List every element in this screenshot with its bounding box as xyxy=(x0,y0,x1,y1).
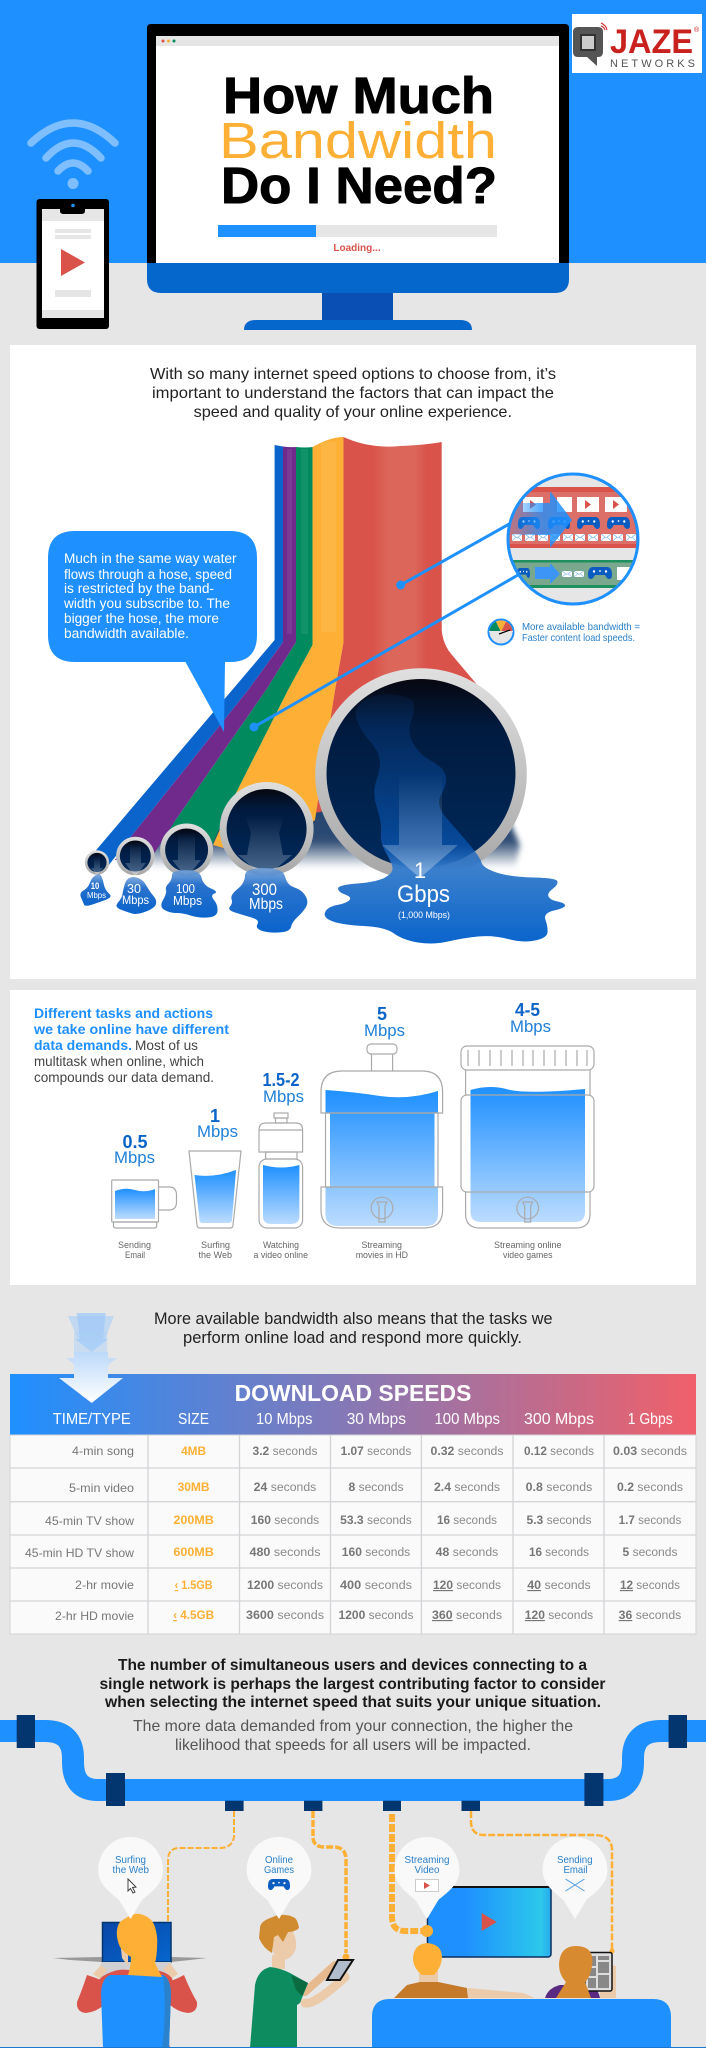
callout: water hose analogy: bigger the hose, the more xyxy=(64,611,219,626)
puddle: 1 Gbps: Gbps xyxy=(397,881,450,908)
text block: simultaneous users: The number of simultaneous users and devices connecting to a xyxy=(118,1657,587,1674)
hose: 100 Mbps green xyxy=(165,447,312,860)
container: large jar 4-5 Mbps: video games xyxy=(503,1250,553,1261)
container: sports bottle 1.5-2 Mbps: 1.5-2 xyxy=(262,1070,300,1090)
loading progress bar: Loading... xyxy=(333,243,381,254)
callout: water hose analogy: Much in the same way water xyxy=(64,551,237,566)
table title: DOWNLOAD SPEEDS xyxy=(235,1380,471,1406)
speed values: 53.3 seconds xyxy=(340,1515,412,1527)
dashed connection: surfing xyxy=(168,1811,234,1923)
text block: simultaneous users xyxy=(100,1657,606,1711)
text block: simultaneous users: when selecting the internet speed that suits your unique situation. xyxy=(104,1694,601,1711)
size column xyxy=(173,1444,214,1622)
title xyxy=(219,67,497,214)
speech bubble: streaming video: Streaming xyxy=(404,1854,450,1866)
row labels xyxy=(25,1444,134,1623)
pipe opening: 30 Mbps xyxy=(116,837,155,877)
speed values: 1200 seconds xyxy=(338,1610,414,1622)
logo: Jaze Networks xyxy=(572,14,702,73)
speech bubble: surfing the web xyxy=(98,1837,163,1919)
speech bubble: online games: Games xyxy=(264,1864,294,1876)
text block: different tasks: data demands. xyxy=(34,1037,132,1053)
text block: different tasks: multitask when online, which xyxy=(34,1053,204,1069)
intro text: With so many internet speed options to choose from, it’s xyxy=(150,366,556,383)
speed values: 480 seconds xyxy=(250,1547,321,1559)
speech bubble: streaming video: Video xyxy=(414,1864,440,1876)
container: mug 0.5 Mbps xyxy=(112,1132,176,1261)
panel: task data demands xyxy=(10,990,696,1285)
puddle: 30 Mbps: Mbps xyxy=(122,893,149,907)
text block: more data demanded: The more data demanded from your connection, the higher the xyxy=(133,1718,573,1735)
hose: 10 Mbps blue xyxy=(90,445,283,870)
column headers: 10 Mbps xyxy=(256,1411,312,1428)
title: How Much xyxy=(223,67,494,124)
callout: water hose analogy: width you subscribe to. The xyxy=(63,596,230,611)
person: man with phone xyxy=(250,1915,353,2048)
container: large jar 4-5 Mbps: Streaming online xyxy=(494,1240,562,1251)
speed values: 400 seconds xyxy=(340,1580,412,1592)
speed values: 2.4 seconds xyxy=(434,1482,500,1494)
pipe opening: 10 Mbps xyxy=(85,850,109,875)
icon: smartphone with play button xyxy=(36,199,109,329)
floor line xyxy=(0,2047,706,2048)
text block: faster load: perform online load and respond more quickly. xyxy=(183,1329,522,1347)
size column: 30MB xyxy=(178,1480,210,1494)
container: water jug 5 Mbps xyxy=(321,1004,443,1261)
speech bubble: online games: Online xyxy=(265,1854,293,1866)
size column: 4MB xyxy=(181,1444,206,1458)
text block: faster load: More available bandwidth also means that the tasks we xyxy=(154,1310,552,1328)
puddle: 10 Mbps xyxy=(80,874,111,906)
callout: water hose analogy xyxy=(48,531,257,732)
person: viewer watching tv xyxy=(394,1943,535,1998)
puddle: 1 Gbps: 1 xyxy=(414,858,426,883)
container: sports bottle 1.5-2 Mbps: Mbps xyxy=(263,1087,304,1106)
puddle: 1 Gbps xyxy=(325,695,565,944)
speed values: 160 seconds xyxy=(342,1547,410,1559)
intro text: important to understand the factors that can impact the xyxy=(152,385,554,402)
title: Bandwidth xyxy=(219,112,497,169)
gauge caption: Faster content load speeds. xyxy=(522,632,635,644)
logo: Jaze Networks: JAZE xyxy=(610,23,693,61)
text block: different tasks: compounds our data demand. xyxy=(34,1069,214,1085)
container: water jug 5 Mbps: 5 xyxy=(377,1004,387,1024)
speed values: 5.3 seconds xyxy=(526,1515,592,1527)
size column: ‹ 4.5GB xyxy=(173,1608,214,1622)
table: download speeds xyxy=(10,1374,696,1634)
icon: wifi signal xyxy=(31,123,115,189)
row labels: 5-min video xyxy=(69,1481,134,1495)
container: glass 1 Mbps: the Web xyxy=(198,1250,232,1261)
row labels: 2-hr movie xyxy=(75,1578,134,1592)
text block: different tasks xyxy=(33,1005,229,1085)
text block: more data demanded: likelihood that speeds for all users will be impacted. xyxy=(175,1737,531,1754)
speed values: 5 seconds xyxy=(622,1547,678,1559)
container: large jar 4-5 Mbps: Mbps xyxy=(510,1017,551,1036)
callout: water hose analogy: flows through a hose, speed xyxy=(64,567,232,582)
container: mug 0.5 Mbps: 0.5 xyxy=(122,1132,148,1152)
text block: more data demanded xyxy=(133,1718,573,1754)
speed values: 3.2 seconds xyxy=(252,1446,318,1458)
puddle: 10 Mbps: Mbps xyxy=(87,891,106,900)
text block: different tasks: Different tasks and actions xyxy=(34,1005,213,1021)
hose: 30 Mbps purple xyxy=(115,446,296,860)
container: water jug 5 Mbps: Streaming xyxy=(362,1240,402,1251)
puddle: 1 Gbps: (1,000 Mbps) xyxy=(398,910,450,920)
dashed connection: email xyxy=(471,1811,614,1954)
puddle: 300 Mbps xyxy=(229,868,307,933)
text block: different tasks: Most of us xyxy=(135,1037,198,1053)
pipe shadow xyxy=(150,800,520,868)
puddle: 300 Mbps: Mbps xyxy=(249,896,283,913)
puddle: 100 Mbps xyxy=(161,870,218,918)
speech bubble: sending email xyxy=(543,1837,607,1919)
container: glass 1 Mbps: Mbps xyxy=(197,1122,238,1141)
speed values: 48 seconds xyxy=(436,1547,499,1559)
television xyxy=(428,1886,551,1957)
title: Do I Need? xyxy=(221,157,497,214)
container: water jug 5 Mbps: Mbps xyxy=(364,1021,405,1040)
speech bubble: sending email: Sending xyxy=(557,1854,593,1866)
callout: water hose analogy: bandwidth available. xyxy=(64,626,189,641)
logo: Jaze Networks: ® xyxy=(694,26,700,34)
column headers: SIZE xyxy=(178,1411,209,1428)
pipe opening: 300 Mbps xyxy=(220,782,314,878)
speed values xyxy=(246,1446,687,1622)
logo: Jaze Networks: NETWORKS xyxy=(610,58,695,70)
container: glass 1 Mbps: 1 xyxy=(210,1106,220,1126)
speed values: 120 seconds xyxy=(433,1580,501,1592)
column headers: TIME/TYPE xyxy=(53,1411,131,1428)
intro text: speed and quality of your online experience. xyxy=(194,404,512,421)
speed values: 24 seconds xyxy=(254,1482,317,1494)
container: large jar 4-5 Mbps: 4-5 xyxy=(515,1000,540,1020)
container: mug 0.5 Mbps: Sending xyxy=(118,1240,151,1251)
container: sports bottle 1.5-2 Mbps: a video online xyxy=(254,1250,308,1261)
icon: desktop monitor xyxy=(147,24,569,330)
column headers: 1 Gbps xyxy=(628,1411,673,1428)
sofa xyxy=(372,1999,671,2048)
pipe opening: 1 Gbps xyxy=(315,668,527,880)
speed values: 360 seconds xyxy=(432,1610,502,1622)
header blue band xyxy=(0,0,706,263)
speed values: 16 seconds xyxy=(529,1547,589,1559)
container: water jug 5 Mbps: movies in HD xyxy=(356,1250,408,1261)
row labels: 45-min TV show xyxy=(45,1514,134,1528)
container: mug 0.5 Mbps: Mbps xyxy=(114,1148,155,1167)
panel: hose comparison xyxy=(10,345,696,979)
container: glass 1 Mbps xyxy=(189,1106,241,1261)
puddle: 30 Mbps: 30 xyxy=(127,881,141,896)
hose: 1 Gbps red xyxy=(315,437,490,813)
container: glass 1 Mbps: Surfing xyxy=(201,1240,230,1251)
column headers xyxy=(53,1411,673,1428)
puddle: 30 Mbps xyxy=(116,877,156,914)
size column: 600MB xyxy=(173,1545,214,1559)
size column: 200MB xyxy=(173,1513,214,1527)
hose: 300 Mbps yellow xyxy=(213,437,344,860)
network pipe xyxy=(0,1715,706,1811)
speed values: 1200 seconds xyxy=(247,1580,323,1592)
row labels: 2-hr HD movie xyxy=(55,1609,134,1623)
container: mug 0.5 Mbps: Email xyxy=(125,1250,145,1261)
speed values: 36 seconds xyxy=(619,1610,682,1622)
person: woman at laptop xyxy=(53,1914,207,2048)
speed values: 0.32 seconds xyxy=(430,1446,504,1458)
speed values: 3600 seconds xyxy=(246,1610,324,1622)
speed values: 1.7 seconds xyxy=(619,1515,682,1527)
speed values: 160 seconds xyxy=(251,1515,319,1527)
speed values: 0.8 seconds xyxy=(526,1482,593,1494)
loading progress bar xyxy=(218,225,497,254)
column headers: 100 Mbps xyxy=(434,1411,500,1428)
puddle: 300 Mbps: 300 xyxy=(252,880,277,899)
row labels: 45-min HD TV show xyxy=(25,1546,134,1560)
text block: different tasks: we take online have different xyxy=(33,1021,229,1037)
intro text xyxy=(150,366,556,421)
arrow: stacked download arrows xyxy=(59,1313,123,1403)
table body xyxy=(10,1435,696,1634)
speed values: 1.07 seconds xyxy=(341,1446,412,1458)
dashed connection: streaming xyxy=(392,1814,433,1937)
speech bubble: streaming video xyxy=(395,1837,459,1919)
icon: speed gauge xyxy=(488,620,514,644)
container: sports bottle 1.5-2 Mbps xyxy=(254,1070,308,1261)
puddle: 100 Mbps: 100 xyxy=(176,881,195,896)
speed values: 16 seconds xyxy=(437,1515,497,1527)
speed values: 0.12 seconds xyxy=(524,1446,594,1458)
gauge caption: More available bandwidth = xyxy=(522,621,640,633)
container: sports bottle 1.5-2 Mbps: Watching xyxy=(263,1240,299,1251)
speech bubble: surfing the web: the Web xyxy=(112,1864,149,1876)
speed values: 120 seconds xyxy=(525,1610,593,1622)
puddle: 10 Mbps: 10 xyxy=(91,881,99,891)
column headers: 300 Mbps xyxy=(524,1411,594,1428)
text block: faster load xyxy=(154,1310,552,1347)
magnifier leader lines xyxy=(250,523,518,732)
speed values: 40 seconds xyxy=(527,1580,591,1592)
row labels: 4-min song xyxy=(72,1444,134,1458)
gauge caption xyxy=(522,621,640,644)
column headers: 30 Mbps xyxy=(347,1411,406,1428)
pipe opening: 100 Mbps xyxy=(160,824,213,878)
size column: ‹ 1.5GB xyxy=(175,1578,213,1592)
puddle: 100 Mbps: Mbps xyxy=(173,893,202,908)
speech bubble: sending email: Email xyxy=(564,1864,588,1876)
speed values: 12 seconds xyxy=(620,1580,680,1592)
speed values: 8 seconds xyxy=(348,1482,404,1494)
callout: water hose analogy: is restricted by the band- xyxy=(64,581,214,596)
dashed connection: games xyxy=(313,1811,350,1960)
table header band xyxy=(10,1374,696,1435)
container: large jar 4-5 Mbps xyxy=(461,1000,594,1261)
speech bubble: surfing the web: Surfing xyxy=(115,1854,146,1866)
person: woman with tablet xyxy=(545,1946,616,1998)
speed values: 0.03 seconds xyxy=(613,1446,687,1458)
text block: simultaneous users: single network is perhaps the largest contributing factor to consider xyxy=(100,1676,606,1693)
magnifier: content traffic comparison xyxy=(500,474,650,604)
speech bubble: online games xyxy=(247,1837,311,1919)
speed values: 0.2 seconds xyxy=(617,1482,683,1494)
